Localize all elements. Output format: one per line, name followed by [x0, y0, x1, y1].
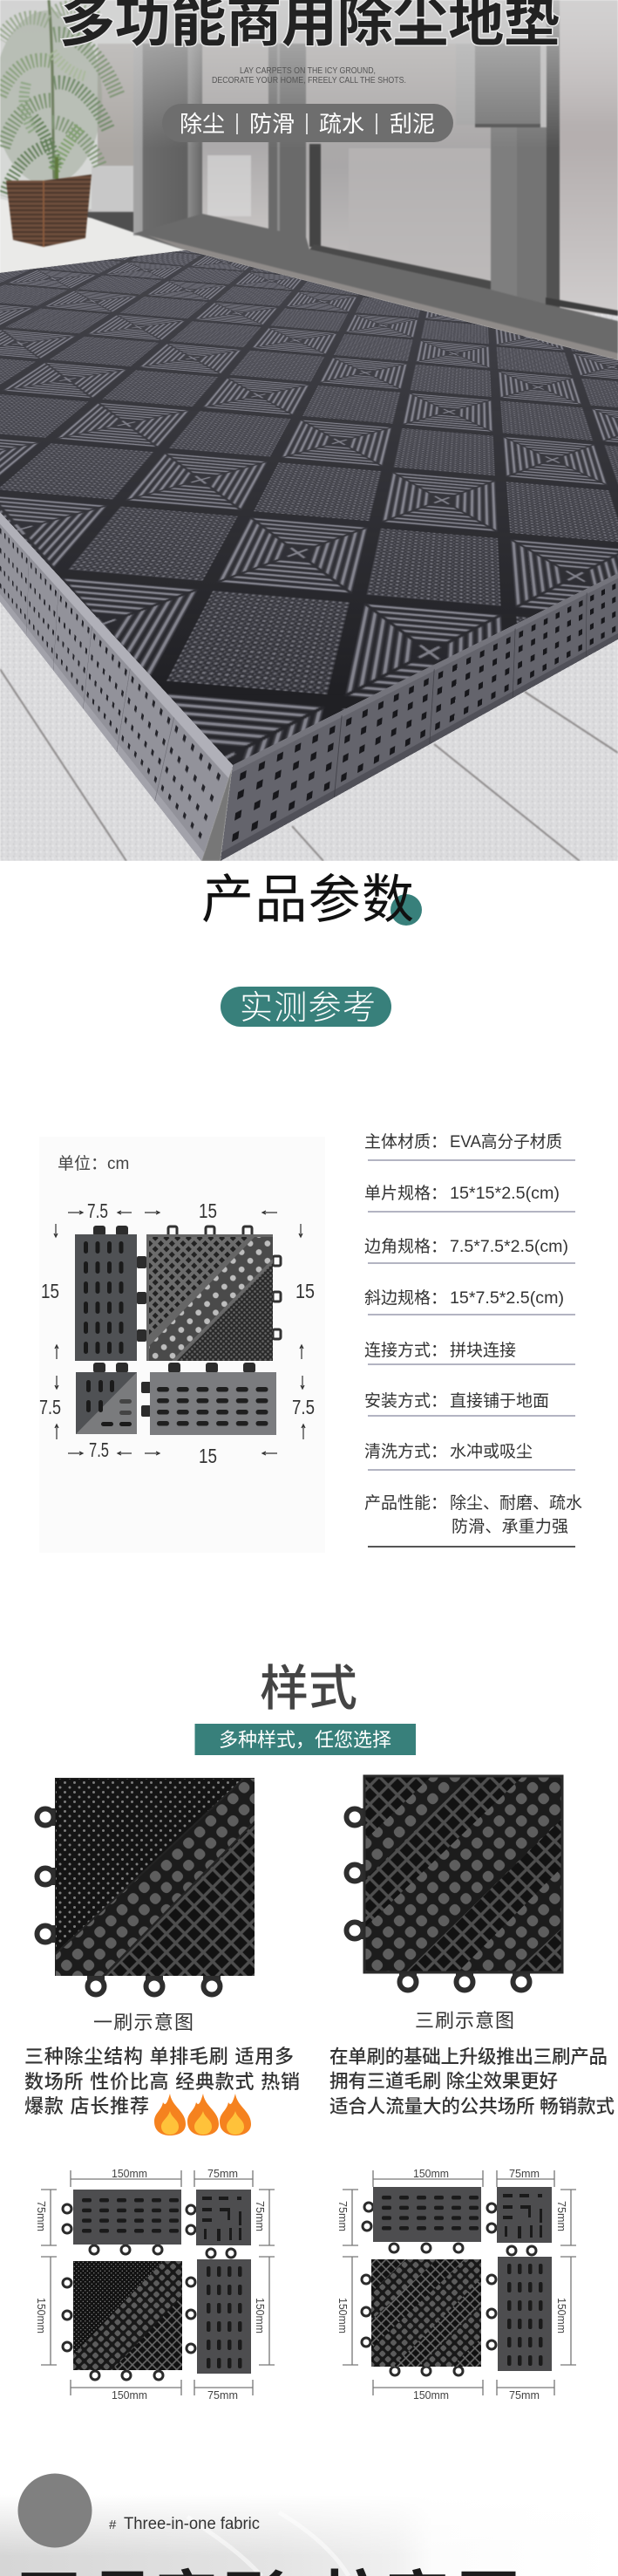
- size labels: 150mm: [35, 2298, 48, 2333]
- icon: potted plant: [0, 0, 118, 247]
- size labels: 75mm: [555, 2201, 568, 2231]
- panel: specification list: 防滑、承重力强: [452, 1517, 568, 1536]
- tiled mat surface in perspective: [0, 250, 618, 765]
- english slogan: DECORATE YOUR HOME, FREELY CALL THE SHOTS.: [212, 75, 406, 85]
- panel: specification list: 7.5*7.5*2.5(cm): [450, 1238, 568, 1256]
- size labels: 150mm: [254, 2298, 267, 2333]
- panel: specification list: 产品性能：: [364, 1493, 447, 1513]
- hero text overlay: [59, 0, 560, 142]
- caption: one brush: 一刷示意图: [93, 2007, 194, 2035]
- text block: three brush description: [329, 2046, 615, 2117]
- panel: specification list: 边角规格：: [364, 1237, 447, 1256]
- dimension diagram: one brush: [35, 2167, 275, 2402]
- hero photo: entrance with dust-removal mat: [0, 0, 618, 861]
- panel: specification list: 15*15*2.5(cm): [450, 1185, 560, 1203]
- size labels: 150mm: [336, 2298, 350, 2333]
- dimension labels: 7.5: [87, 1199, 108, 1222]
- size labels: 150mm: [112, 2388, 147, 2402]
- size labels: 75mm: [207, 2167, 238, 2180]
- text block: one brush description: [24, 2046, 300, 2117]
- banner: many styles: [195, 1724, 416, 1755]
- dimension diagram: three brush: [336, 2167, 576, 2402]
- panel: specification list: 连接方式：: [364, 1341, 447, 1360]
- dimension labels: 7.5: [89, 1438, 109, 1461]
- text block: one brush description: 爆款 店长推荐: [24, 2095, 149, 2117]
- text block: three brush description: 拥有三道毛刷 除尘效果更好: [329, 2071, 558, 2092]
- panel: specification list: 斜边规格：: [364, 1288, 447, 1308]
- tile knobs: [362, 2203, 536, 2375]
- panel: specification list: [364, 1132, 582, 1547]
- right border ramp strip: [221, 573, 618, 861]
- dimension labels: 15: [41, 1280, 59, 1302]
- dimension labels: 7.5: [39, 1396, 61, 1418]
- left border ramp strip: [0, 251, 493, 860]
- feature pill: 除尘: [180, 111, 225, 137]
- english slogan: [212, 65, 406, 85]
- english slogan: LAY CARPETS ON THE ICY GROUND,: [240, 65, 376, 76]
- tile: edge piece 15 x 7.5: [141, 1363, 276, 1435]
- tile knobs: [63, 2204, 235, 2380]
- size labels: [336, 2167, 568, 2402]
- size labels: 75mm: [509, 2167, 540, 2180]
- dimension lines: [343, 2170, 576, 2395]
- banner: many styles: 多种样式，任您选择: [219, 1725, 391, 1753]
- panel: specification list: EVA高分子材质: [450, 1132, 562, 1151]
- dimension labels: 15: [199, 1445, 217, 1467]
- size labels: 75mm: [336, 2201, 350, 2231]
- dimension arrows: [54, 1211, 305, 1455]
- panel: specification list: 水冲或吸尘: [450, 1442, 533, 1461]
- icon: three flames: [154, 2094, 251, 2135]
- panel: specification list: 主体材质：: [364, 1132, 447, 1151]
- feature pill: 防滑: [249, 111, 295, 137]
- panel: specification list: 除尘、耐磨、疏水: [450, 1493, 582, 1513]
- unit label: 单位：cm: [58, 1154, 129, 1173]
- size labels: 75mm: [35, 2201, 48, 2231]
- text block: three brush description: 适合人流量大的公共场所 畅销款式: [329, 2096, 615, 2117]
- dimension lines: [41, 2170, 275, 2395]
- tile: brush piece 15 x 15: [146, 1227, 281, 1361]
- bottom section background: [0, 2495, 618, 2576]
- tile: corner piece 7.5 x 7.5: [76, 1363, 137, 1434]
- product: one-brush tile: [37, 1778, 255, 1994]
- text block: three brush description: 在单刷的基础上升级推出三刷产品: [329, 2046, 608, 2067]
- panel: specification list: 单片规格：: [364, 1184, 447, 1203]
- size labels: [35, 2167, 267, 2402]
- dimension labels: 7.5: [292, 1396, 315, 1418]
- panel: specification list: 拼块连接: [450, 1341, 516, 1360]
- size labels: 75mm: [254, 2201, 267, 2231]
- panel: specification list: 直接铺于地面: [450, 1391, 549, 1411]
- panel: specification list: 15*7.5*2.5(cm): [450, 1289, 564, 1308]
- icon: wooden pot: [6, 174, 92, 247]
- dimension labels: 15: [295, 1280, 315, 1302]
- subheading: three in one fabric: #: [109, 2518, 117, 2532]
- subheading: three in one fabric: Three-in-one fabric: [124, 2515, 260, 2533]
- size labels: 75mm: [207, 2388, 238, 2402]
- section heading: styles: 样式: [260, 1650, 357, 1720]
- panel: specification list: 安装方式：: [364, 1391, 447, 1411]
- size labels: 75mm: [509, 2388, 540, 2402]
- size labels: 150mm: [413, 2167, 449, 2180]
- decorative grey circle: [17, 2474, 92, 2547]
- panel: specification list: 清洗方式：: [364, 1442, 447, 1461]
- product: three-brush tile: [347, 1776, 562, 1991]
- pill: measured reference: 实测参考: [240, 981, 376, 1028]
- feature pill: [162, 104, 453, 142]
- text block: one brush description: 三种除尘结构 单排毛刷 适用多: [24, 2046, 294, 2067]
- text block: one brush description: 数场所 性价比高 经典款式 热销: [24, 2071, 300, 2093]
- size labels: 150mm: [555, 2298, 568, 2333]
- tile: edge piece 7.5 x 15: [75, 1226, 146, 1361]
- caption: three brush: 三刷示意图: [415, 2005, 514, 2033]
- size labels: 150mm: [112, 2167, 147, 2180]
- dimension labels: 15: [199, 1199, 217, 1222]
- dimension labels: [39, 1199, 315, 1467]
- size labels: 150mm: [413, 2388, 449, 2402]
- doorway scene and plant: [0, 0, 618, 861]
- section heading: product parameters: 产品参数: [201, 858, 414, 933]
- feature pill: 疏水: [319, 111, 364, 137]
- panel: size diagram: [39, 1137, 325, 1553]
- feature pill: 刮泥: [390, 111, 435, 137]
